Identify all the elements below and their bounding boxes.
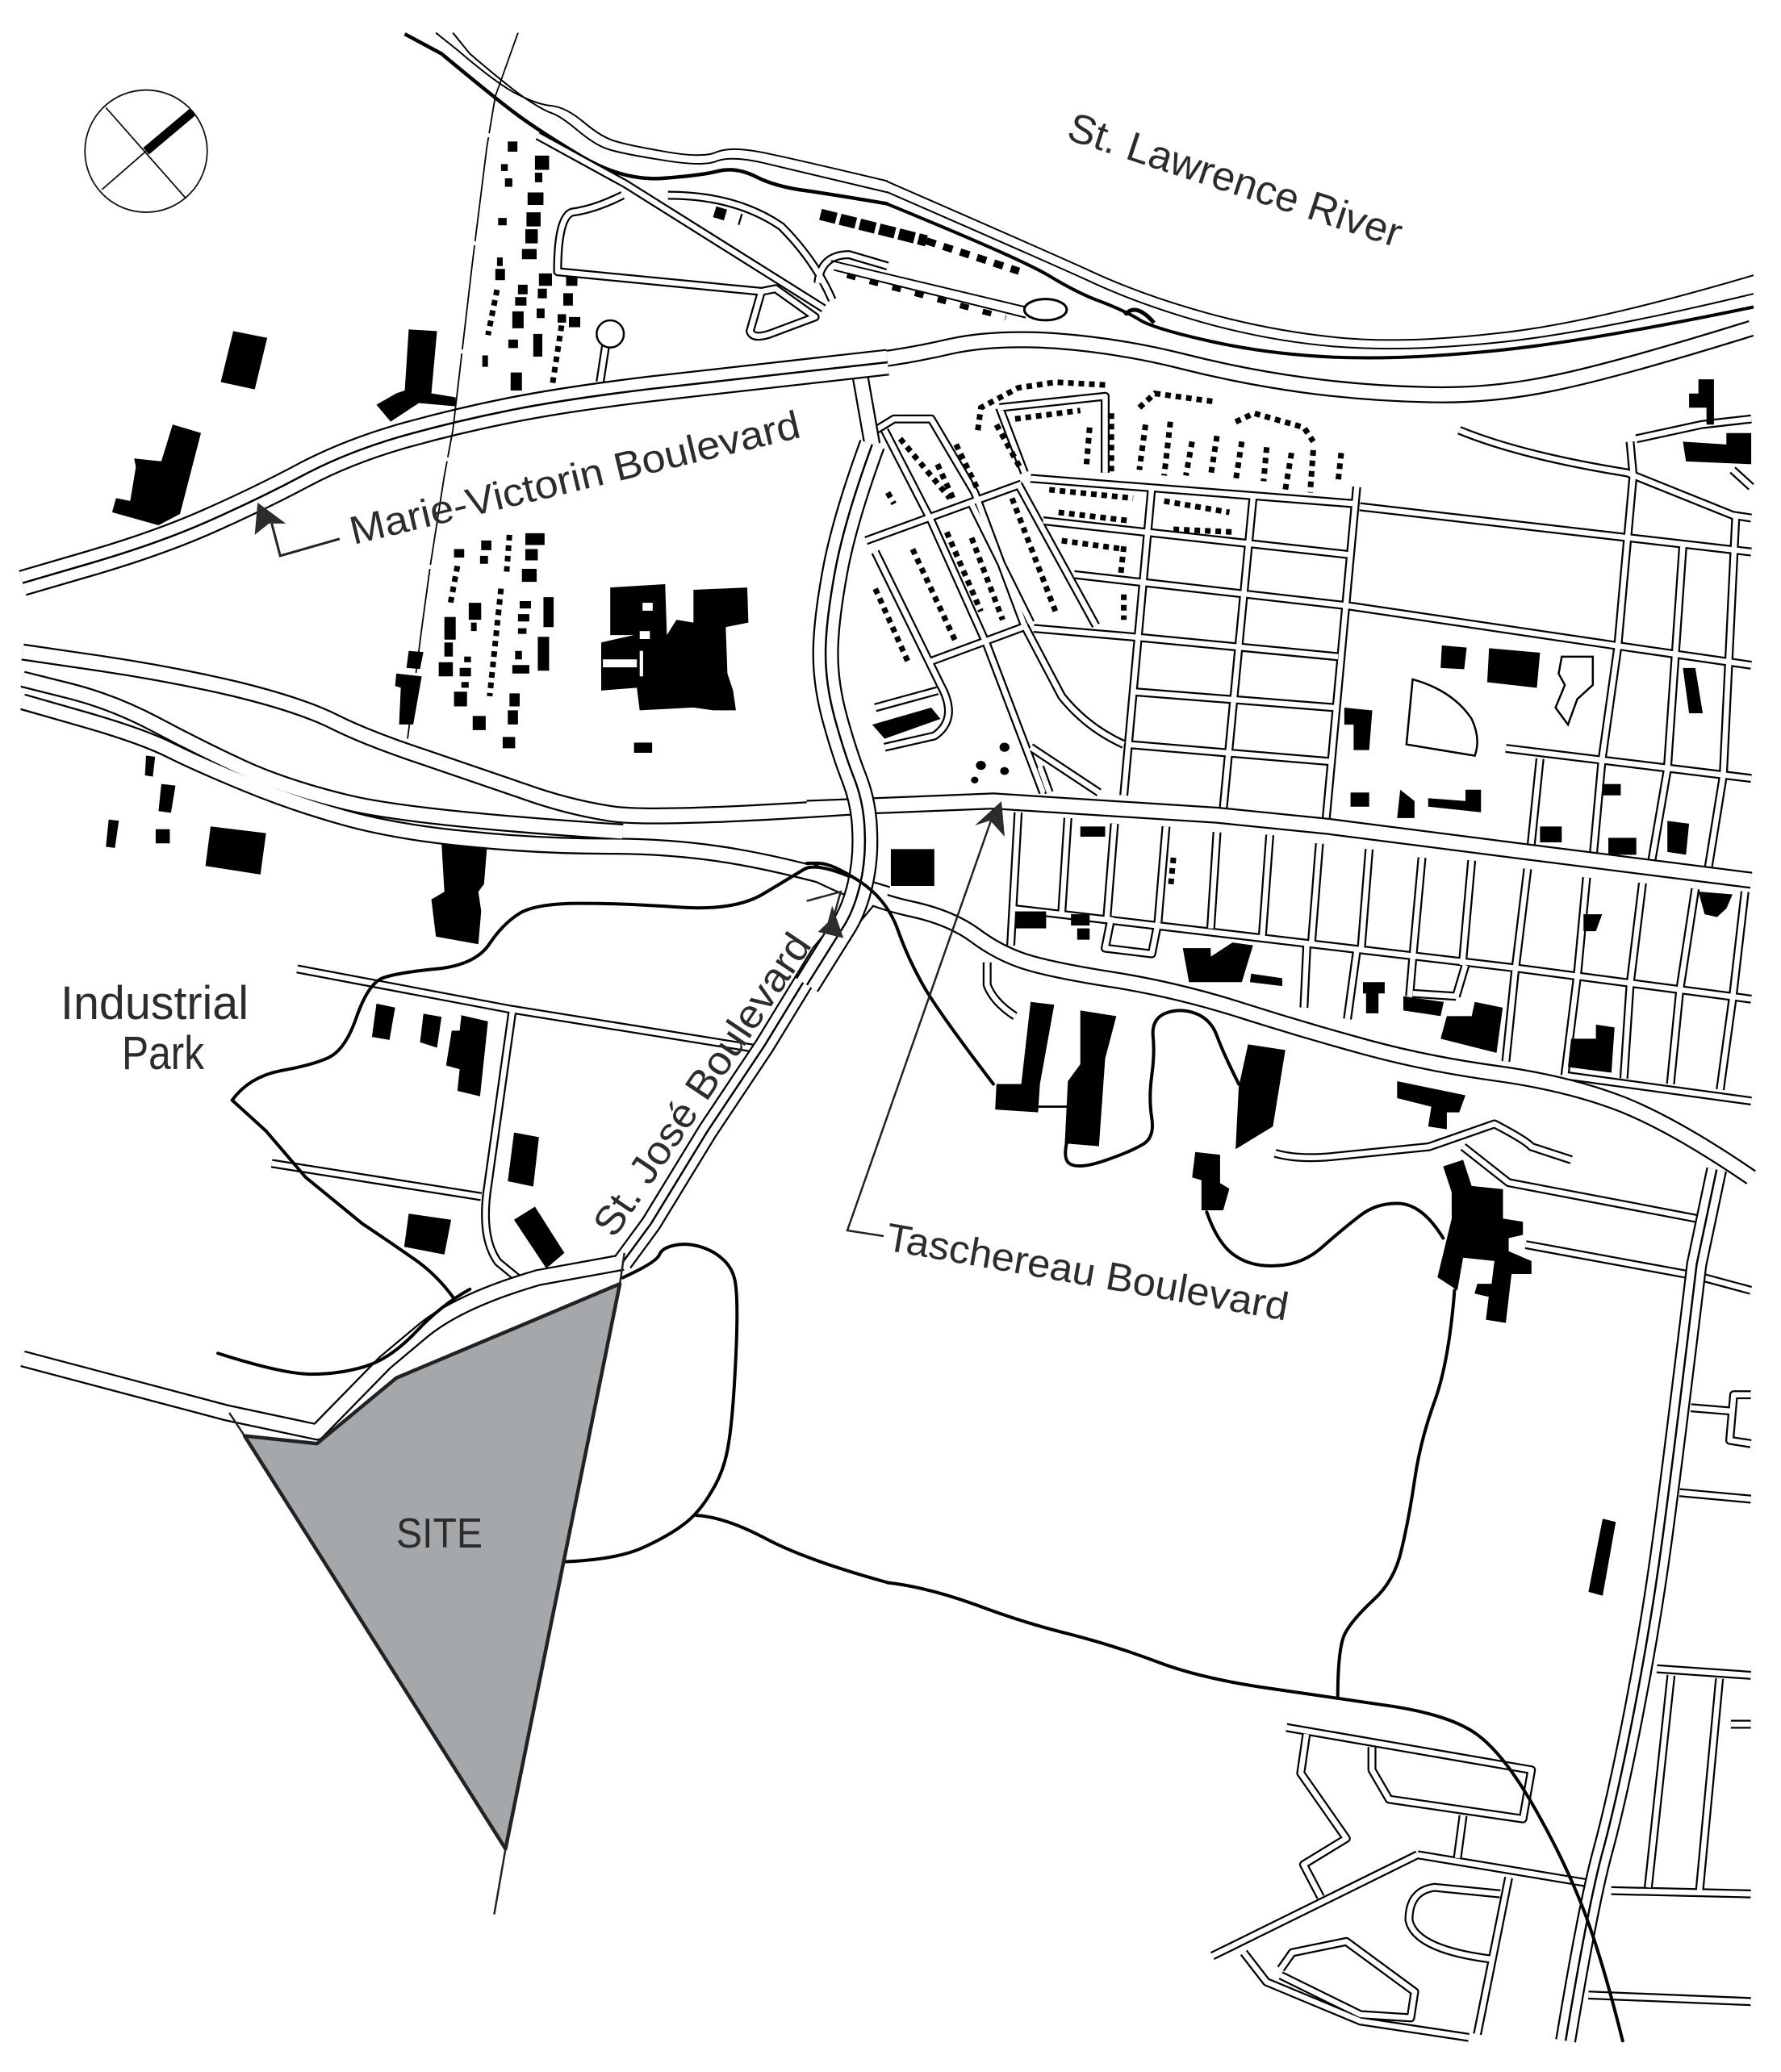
- buildings, southeast: [1437, 1159, 1616, 1596]
- compass: [85, 90, 207, 212]
- label: Marie-Victorin Boulevard: Marie-Victorin Boulevard: [345, 403, 805, 554]
- site parcel: [229, 1253, 625, 1915]
- label: St. Lawrence River: St. Lawrence River: [1063, 103, 1408, 256]
- label: St. José Boulevard: St. José Boulevard: [584, 925, 820, 1244]
- St. José and eastern boulevards with median: [623, 900, 1716, 2041]
- park outlines: ball field and pond: [1407, 657, 1593, 756]
- riverside road loop: [831, 261, 1067, 320]
- buildings west and north: [106, 141, 748, 875]
- leader: St. José Boulevard: [807, 892, 843, 938]
- St. Lawrence River: [405, 33, 1754, 358]
- streams and creek lines: [218, 863, 1623, 2041]
- label: Park: Park: [122, 1027, 205, 1080]
- small houses, north and central blocks: [483, 141, 580, 391]
- municipal boundary line: [408, 33, 518, 738]
- rows of small houses, dotted: [450, 211, 1341, 889]
- label: SITE: SITE: [396, 1510, 483, 1557]
- buildings along the grid: [872, 379, 1751, 1210]
- street grid: [272, 136, 1751, 2037]
- main boulevards: [23, 328, 1751, 1432]
- label: Industrial: Industrial: [61, 977, 249, 1030]
- cul-de-sac: [596, 320, 624, 348]
- label: Taschereau Boulevard: Taschereau Boulevard: [883, 1216, 1292, 1330]
- buildings, industrial park: [372, 844, 564, 1268]
- leader: Taschereau Boulevard: [847, 801, 1005, 1236]
- leader: Marie-Victorin Boulevard: [255, 503, 340, 556]
- Marie-Victorin and ring boulevards with median: [23, 362, 888, 985]
